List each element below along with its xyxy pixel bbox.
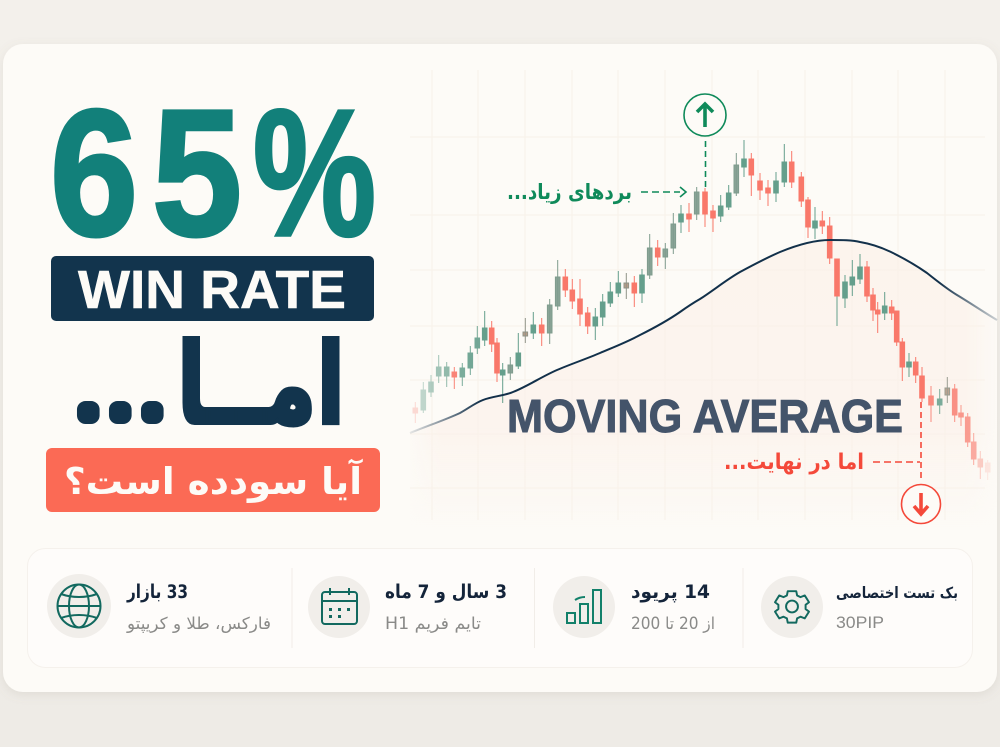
stat: markets xyxy=(47,574,271,638)
callout: in the end: اما در نهایت... xyxy=(724,450,864,475)
headline: 65% xyxy=(50,73,376,274)
stat: backtest xyxy=(761,576,958,638)
candlesticks xyxy=(413,140,990,480)
question badge: آیا سودده است؟ xyxy=(64,458,363,503)
stat: duration: تایم فریم H1 xyxy=(385,614,481,634)
moving average label: MOVING AVERAGE xyxy=(507,390,903,442)
callout: many wins: بردهای زیاد... xyxy=(507,180,632,204)
stat: markets: 33 بازار xyxy=(126,581,188,603)
stat: backtest: بک تست اختصاصی xyxy=(836,584,958,602)
win rate badge: WIN RATE xyxy=(78,260,346,320)
stats panel xyxy=(28,548,972,668)
question badge xyxy=(46,448,380,512)
up marker xyxy=(684,94,726,190)
moving average area xyxy=(436,241,970,444)
stat: markets: فارکس، طلا و کریپتو xyxy=(126,614,271,634)
headline: 65%: 6 xyxy=(50,73,138,274)
stat: duration xyxy=(308,576,507,638)
down marker xyxy=(902,402,940,524)
heading: but xyxy=(83,320,345,450)
stat: periods: از 20 تا 200 xyxy=(631,614,715,634)
heading: but: امــا xyxy=(177,320,345,450)
chart panel xyxy=(410,70,997,530)
headline: 65%: 5 xyxy=(152,73,242,274)
headline: 65%: % xyxy=(253,73,376,274)
stat: periods: 14 پریود xyxy=(631,581,710,603)
stat: duration: 3 سال و 7 ماه xyxy=(385,581,507,603)
stat: backtest: 30PIP xyxy=(836,614,884,632)
moving average line xyxy=(410,240,997,433)
stat: periods xyxy=(553,576,715,638)
heading: but: ... xyxy=(83,381,158,425)
